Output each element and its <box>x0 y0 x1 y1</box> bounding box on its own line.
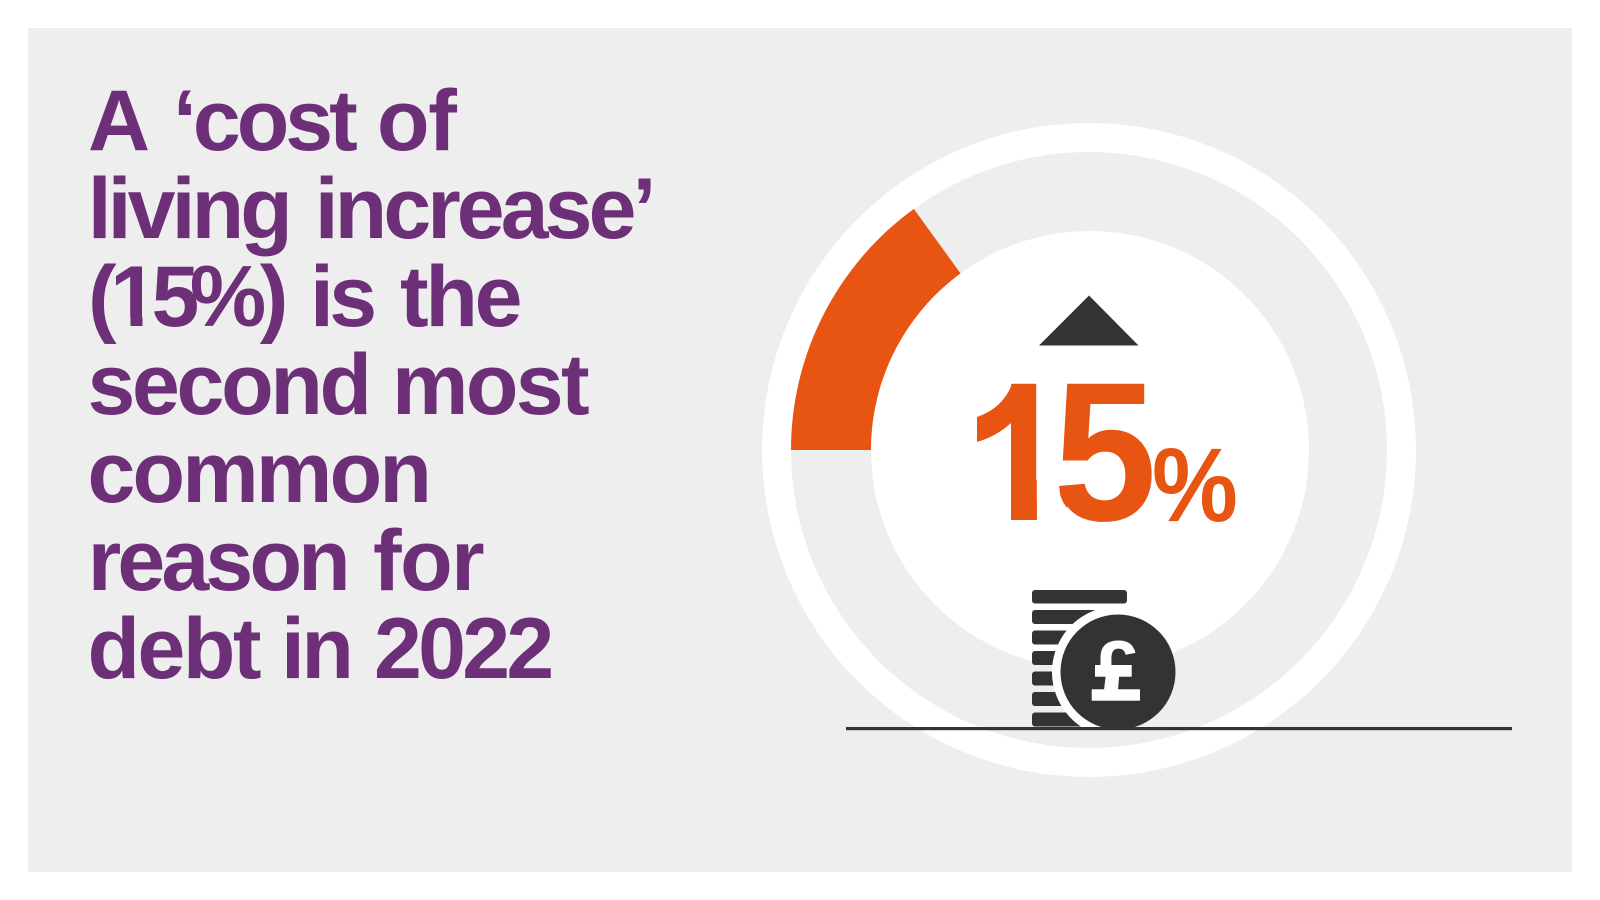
heading: second <box>88 337 369 433</box>
heading: increase’ <box>315 161 653 257</box>
heading: the <box>400 249 520 345</box>
icon: pound coin stack <box>1032 590 1176 730</box>
heading: of <box>377 73 457 169</box>
stat: 15 percent: % <box>1152 427 1238 544</box>
heading: most <box>392 337 589 433</box>
heading: 2022 <box>374 601 551 697</box>
pound sign <box>1092 640 1140 701</box>
icon: up arrow <box>1039 296 1138 346</box>
stat: 15 percent <box>977 384 1236 522</box>
donut segment: 15% <box>791 209 961 450</box>
heading: reason <box>88 513 347 609</box>
heading: in <box>281 601 350 697</box>
stat: 15 percent: 15 <box>967 341 1152 562</box>
pound sign: £ <box>1092 624 1140 720</box>
heading: A <box>88 73 148 169</box>
baseline <box>846 727 1512 730</box>
coin halo <box>1052 606 1118 727</box>
coin <box>1060 614 1176 730</box>
heading: ‘cost <box>173 73 357 169</box>
heading: living <box>88 161 289 257</box>
heading: (15%) <box>88 249 282 345</box>
heading: is <box>310 249 374 345</box>
donut chart: 15 percent <box>762 123 1416 777</box>
heading <box>88 73 653 697</box>
heading: debt <box>88 601 261 697</box>
coin stack bars <box>1032 590 1127 726</box>
heading: for <box>373 513 484 609</box>
heading: common <box>88 425 429 521</box>
